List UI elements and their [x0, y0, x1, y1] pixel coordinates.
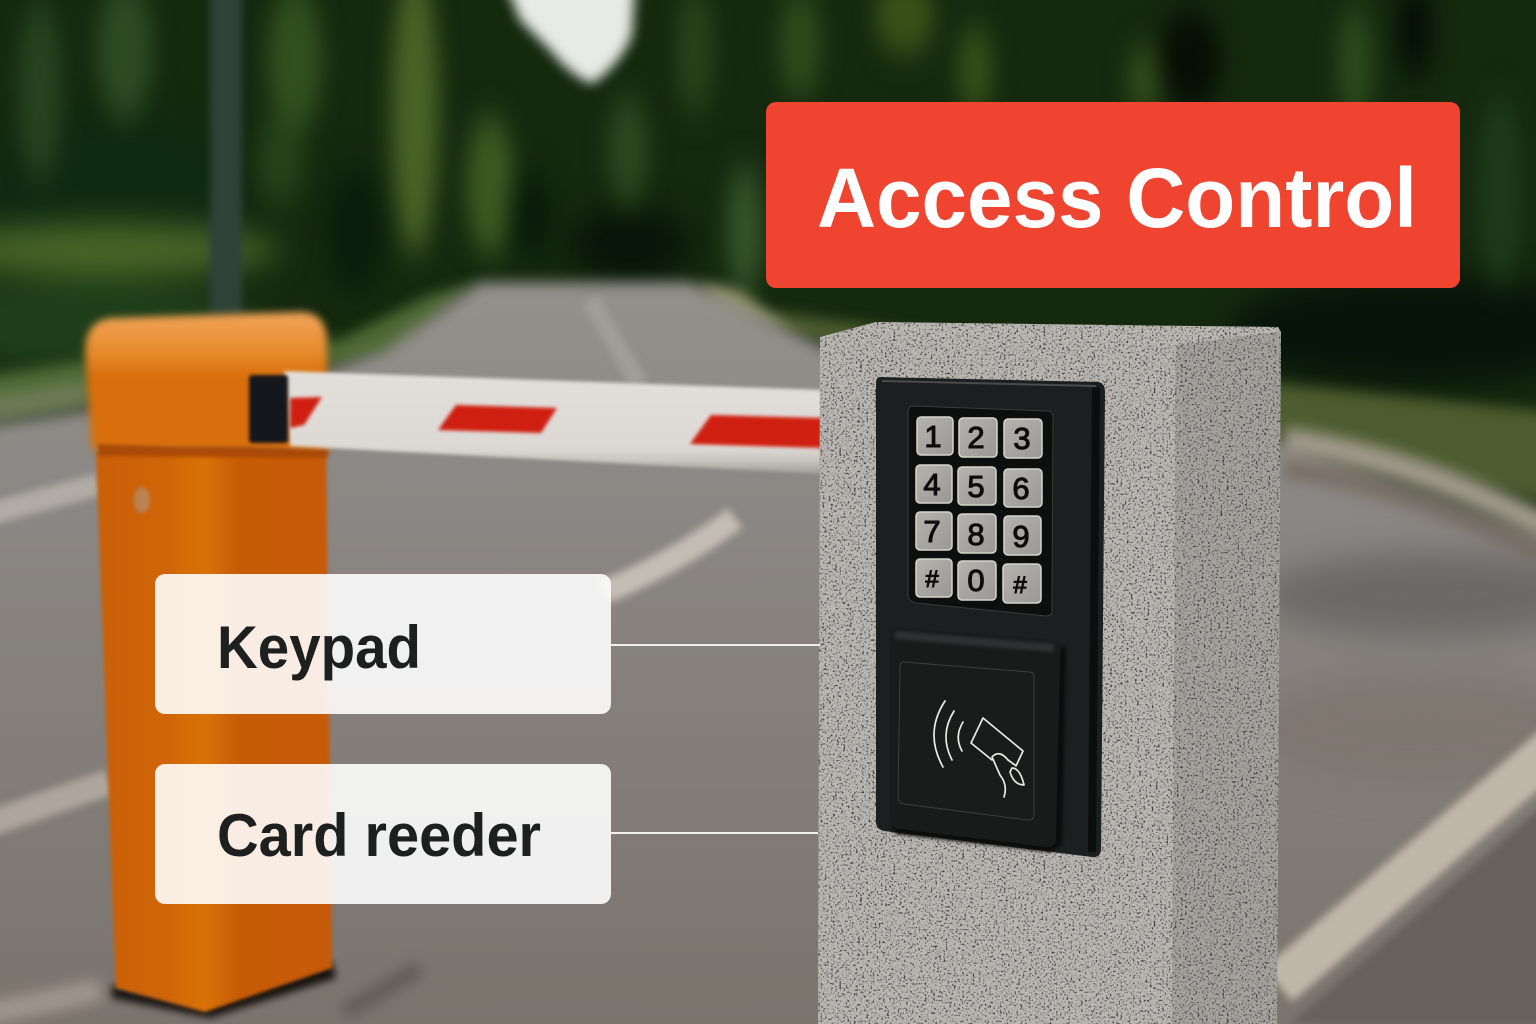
road edge patches: [1250, 553, 1536, 785]
curbs and lane markings: [1284, 440, 1536, 572]
lamp pole: [210, 0, 242, 315]
key 5: [958, 467, 996, 505]
key 4: 4: [923, 467, 941, 502]
label: card reader: Card reeder: [217, 802, 541, 869]
label: keypad: [155, 574, 611, 714]
reader housing: [890, 628, 1060, 847]
key 3: [1004, 419, 1042, 458]
key 3: 3: [1013, 421, 1031, 456]
housing head: [85, 312, 328, 452]
label: card reader: [155, 764, 611, 904]
key 2: [959, 418, 997, 457]
pillar top: [820, 322, 1281, 346]
leader line: card reader: [611, 832, 818, 834]
reader face: [898, 662, 1034, 820]
key 1: 1: [924, 419, 942, 454]
key hash right: [1003, 564, 1041, 603]
arm red stripes: [290, 397, 822, 448]
access panel: [876, 377, 1105, 857]
panel plate: [876, 377, 1105, 857]
housing seam band: [98, 444, 328, 458]
key 2: 2: [967, 420, 985, 455]
grass verges: [0, 282, 1536, 510]
ground shadow marks: [0, 968, 420, 1020]
base shadow: [112, 962, 336, 1018]
label: keypad: Keypad: [217, 614, 421, 681]
keypad well: [908, 406, 1053, 616]
title text: Access Control: [817, 151, 1417, 245]
leader line: keypad: [611, 644, 820, 646]
key hash right: #: [1013, 572, 1027, 599]
key 9: 9: [1012, 519, 1030, 554]
key 5: 5: [967, 469, 985, 504]
barrier housing: [85, 312, 336, 1018]
pillar side face: [1172, 331, 1281, 1024]
road surface interior: [0, 300, 1536, 1024]
barrier arm: [249, 371, 822, 474]
keypad keys: [916, 417, 1042, 603]
key 0: 0: [967, 563, 985, 598]
key 8: 8: [967, 517, 985, 552]
card reader: [890, 628, 1066, 852]
title banner: [766, 102, 1460, 288]
housing lock: [134, 487, 150, 513]
sky gap: [500, 0, 636, 84]
vertical tree streaks: [18, 0, 1522, 295]
key 8: [958, 514, 996, 553]
reader shadow: [890, 645, 1066, 852]
key 6: [1004, 469, 1042, 507]
key 1: [917, 417, 953, 455]
arm bracket: [249, 375, 288, 443]
arm beam: [284, 371, 822, 474]
key 7: [916, 512, 952, 550]
key 7: 7: [923, 514, 941, 549]
key 0: [958, 561, 996, 600]
contactless icon: [934, 701, 1024, 797]
tree foliage: [0, 110, 1536, 385]
road surface edge: [0, 282, 1536, 1024]
key 6: 6: [1012, 471, 1030, 506]
key 4: [916, 465, 952, 503]
pillar front face: [818, 337, 1176, 1024]
key 9: [1004, 516, 1041, 555]
key hash left: #: [925, 566, 939, 593]
granite pillar: [818, 322, 1281, 1024]
housing lower body: [96, 452, 332, 1012]
key hash left: [916, 559, 952, 597]
